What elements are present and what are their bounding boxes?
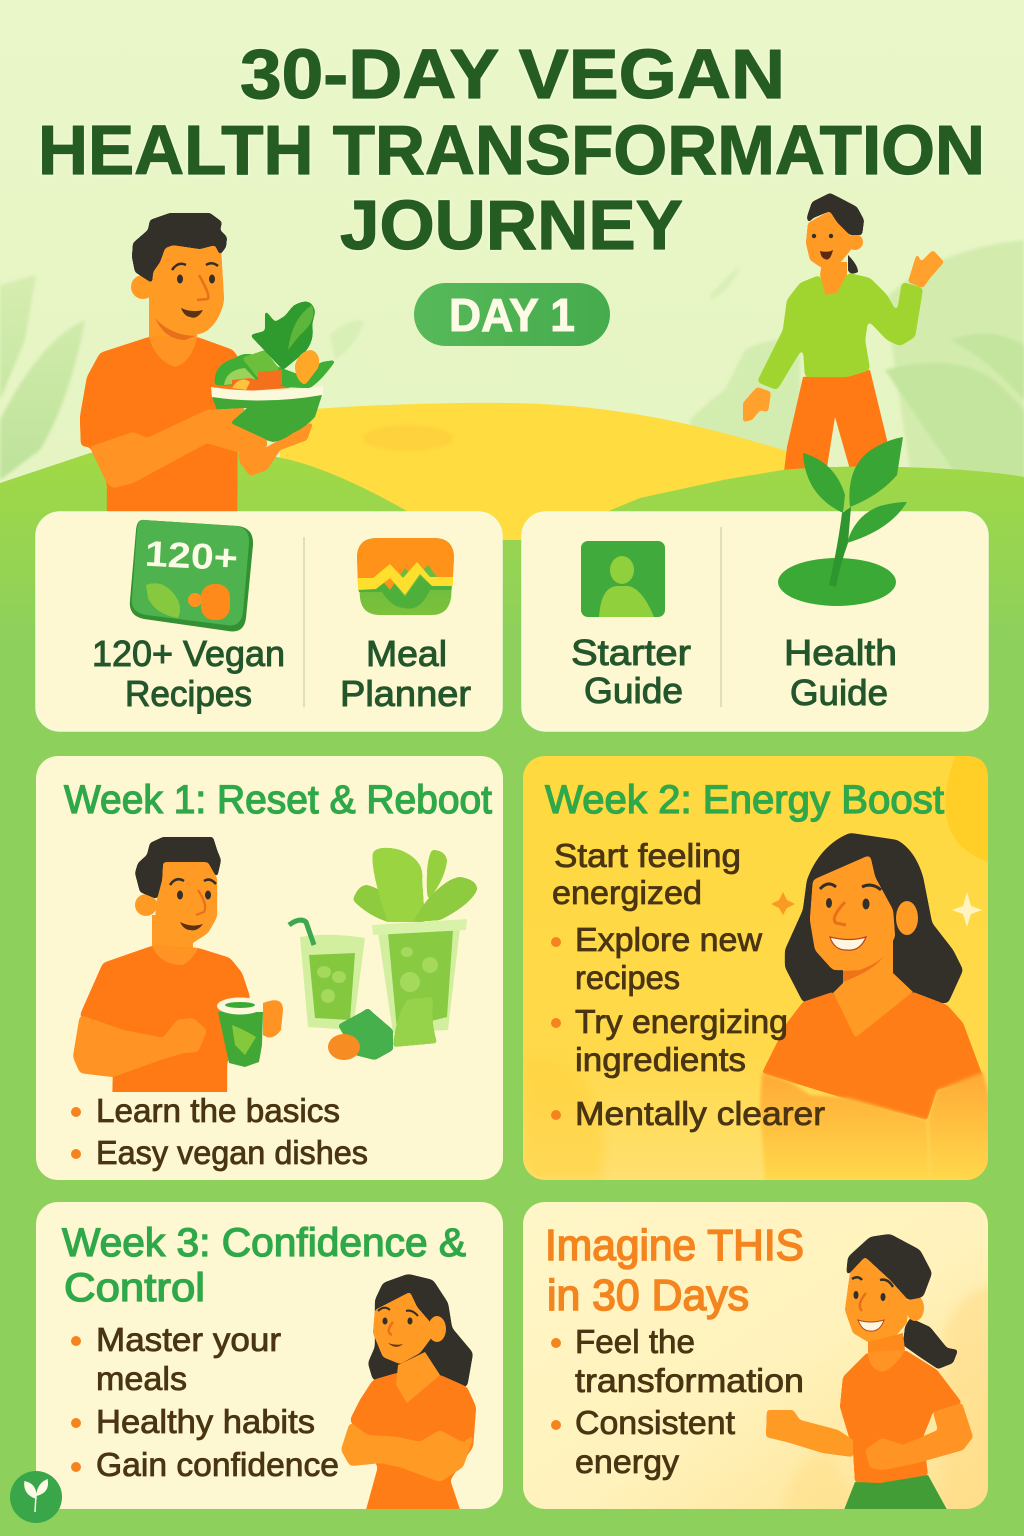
heading: imagine this: in 30 Days — [547, 1271, 749, 1320]
label: health guide — [784, 632, 897, 713]
salad in bowl — [215, 302, 336, 392]
icon: logo sprout badge — [10, 1471, 62, 1523]
bullet list: Gain confidence — [96, 1446, 339, 1483]
heading: week 2: Week 2: Energy Boost — [545, 778, 944, 822]
bullet list — [551, 837, 825, 1132]
bullet list: recipes — [575, 959, 680, 996]
bullet list: Learn the basics — [96, 1092, 340, 1129]
bullet list: energized — [552, 874, 702, 911]
icon: sparkles — [771, 892, 982, 927]
label: starter guide — [571, 632, 691, 711]
title: HEALTH TRANSFORMATION — [38, 111, 985, 189]
bullet list: ingredients — [575, 1041, 746, 1078]
bullet list — [71, 1321, 339, 1483]
bullet list: Mentally clearer — [575, 1095, 825, 1132]
bullet list: Consistent — [575, 1404, 735, 1441]
illustration: jogging woman — [766, 1234, 973, 1515]
bullet list: Master your — [96, 1321, 281, 1358]
label: starter guide: Guide — [584, 670, 683, 711]
panel: week 2 — [523, 756, 990, 1180]
icon: 120+ recipes — [130, 520, 253, 631]
bullet list: transformation — [575, 1362, 804, 1399]
panel: resources left — [36, 512, 502, 731]
bullet list — [71, 1092, 368, 1171]
label: starter guide: Starter — [571, 632, 691, 673]
hill foreground under plant — [722, 467, 1024, 515]
label: 120+ vegan recipes: 120+ Vegan — [92, 633, 285, 674]
divider — [720, 527, 722, 707]
heading: imagine this — [545, 1221, 804, 1320]
icon: starter guide — [581, 541, 665, 617]
title: JOURNEY — [340, 186, 683, 264]
heading: week 1: Week 1: Reset & Reboot — [64, 778, 492, 822]
label: 120+ vegan recipes — [92, 633, 285, 714]
panel: resources right — [522, 437, 988, 731]
bullet list: Feel the — [575, 1323, 695, 1360]
bullet list: energy — [575, 1443, 680, 1480]
title: 30-DAY VEGAN — [240, 35, 785, 113]
bullet list: meals — [96, 1360, 187, 1397]
divider — [303, 537, 305, 707]
bullet list: Start feeling — [554, 837, 741, 874]
day 1 badge — [414, 283, 610, 346]
bullet list: Explore new — [575, 921, 762, 958]
illustration: man with green drink — [73, 837, 283, 1110]
illustration: woman with crossed arms — [341, 1274, 476, 1525]
label: health guide: Guide — [790, 672, 888, 713]
label: 120+ vegan recipes: Recipes — [125, 673, 252, 714]
panel: week 1 — [36, 756, 503, 1180]
bullet list: Healthy habits — [96, 1403, 315, 1440]
label: meal planner: Meal — [366, 633, 447, 674]
bullet list: Easy vegan dishes — [96, 1134, 368, 1171]
heading: imagine this: Imagine THIS — [545, 1221, 804, 1270]
title — [38, 35, 985, 264]
day 1 badge: DAY 1 — [449, 289, 575, 341]
label: meal planner — [340, 633, 471, 714]
illustration: smiling woman — [760, 833, 990, 1180]
label: meal planner: Planner — [340, 673, 471, 714]
label: health guide: Health — [784, 632, 897, 673]
panel: week 3 — [36, 1202, 503, 1525]
bullet list: Try energizing — [575, 1003, 788, 1040]
bullet list — [551, 1323, 804, 1480]
icon: meal planner — [357, 538, 454, 615]
illustration: man holding salad bowl — [80, 213, 336, 530]
heading: week 3: Control — [64, 1266, 205, 1310]
icon: plant sprout — [778, 437, 907, 606]
panel: imagine this in 30 days — [523, 1202, 995, 1515]
illustration: green smoothies and vegetables — [289, 848, 477, 1060]
icon: 120+ recipes: 120+ — [144, 533, 239, 578]
heading: week 3: Week 3: Confidence & — [62, 1221, 466, 1265]
illustration: waving woman — [743, 193, 944, 480]
heading: week 3 — [62, 1221, 466, 1310]
